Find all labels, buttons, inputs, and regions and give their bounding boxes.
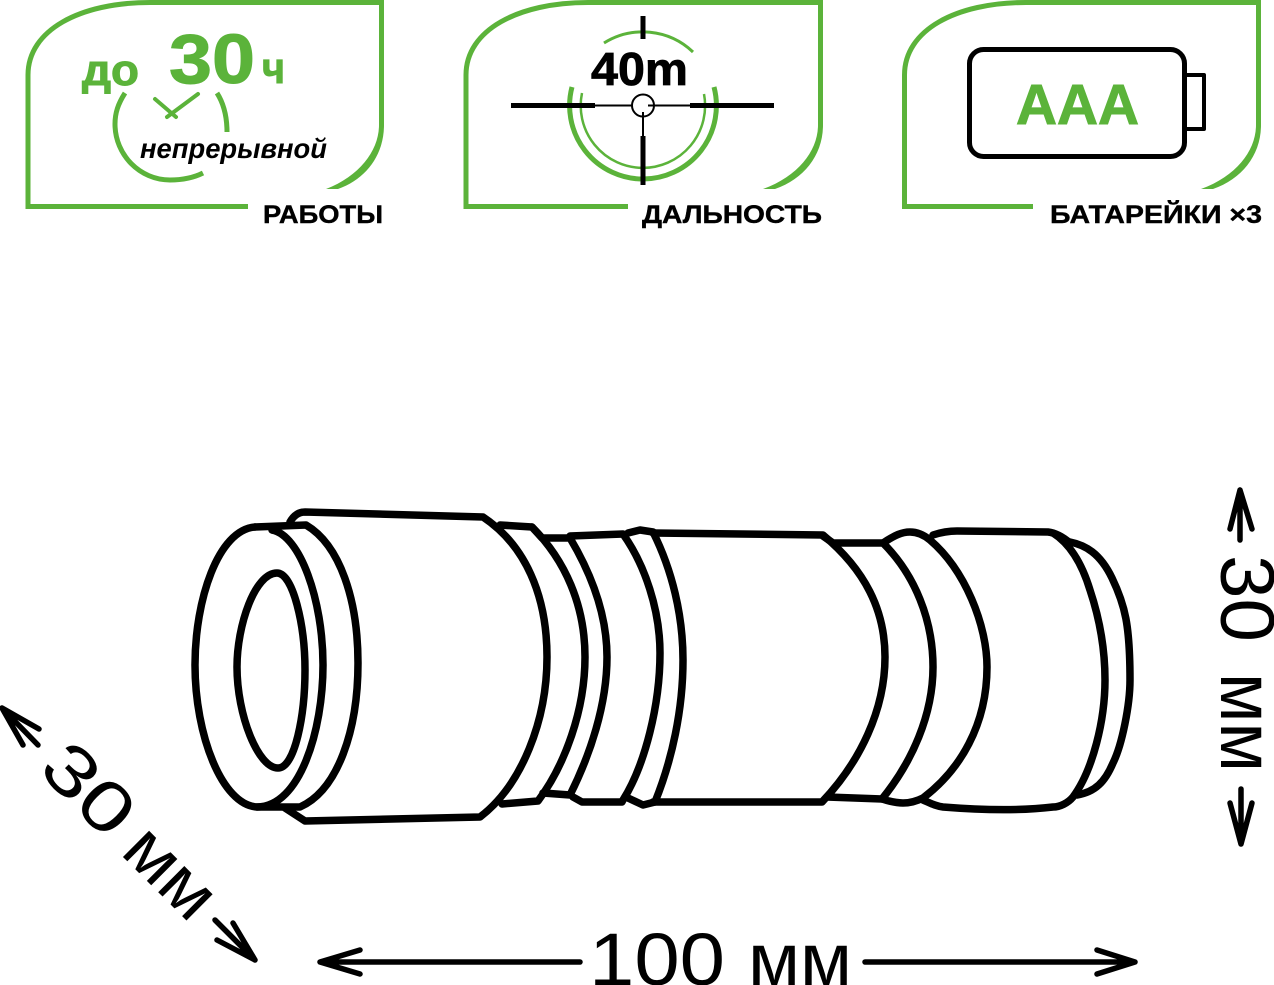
end cap rim — [1070, 542, 1130, 795]
dimension: length 100 mm — [320, 918, 1135, 985]
text: AAA: AAA — [1016, 73, 1139, 137]
arrow: up — [1230, 490, 1252, 540]
mid body — [570, 534, 660, 802]
neck band — [532, 527, 607, 795]
lens opening — [237, 573, 305, 768]
label: batteries x3: БАТАРЕЙКИ ×3 — [1050, 199, 1262, 229]
value: 40 m: 40m — [591, 43, 688, 95]
text: 30 mm — [1204, 555, 1274, 772]
end cap body — [923, 531, 1105, 810]
text: 30 mm: 30 — [26, 726, 152, 852]
big value: up to 30 hours: ч — [262, 44, 285, 93]
tail band — [823, 536, 933, 799]
dimension: height 30 mm — [1204, 490, 1274, 844]
big value: up to 30 hours: до — [82, 46, 139, 95]
panel frame — [904, 2, 1261, 206]
panel: working time — [28, 2, 384, 229]
icon: crosshair — [511, 16, 774, 185]
text: continuous: непрерывной — [140, 133, 327, 164]
big value: up to 30 hours — [82, 20, 285, 98]
dimension: depth 30 mm — [2, 708, 255, 960]
grip ring — [628, 530, 683, 805]
arrow: left — [320, 950, 580, 974]
bezel ring — [255, 525, 358, 807]
icon: battery — [970, 50, 1204, 156]
label: range: ДАЛЬНОСТЬ — [642, 201, 822, 229]
panel frame — [28, 2, 384, 206]
front lens ring — [195, 527, 323, 807]
head body — [285, 512, 547, 821]
panel: batteries — [904, 2, 1262, 229]
collar band — [500, 525, 585, 804]
icon: clock — [115, 93, 227, 180]
panel frame — [466, 2, 823, 206]
tail ring — [882, 532, 987, 803]
flashlight drawing — [195, 512, 1130, 821]
arrow: right — [865, 950, 1135, 974]
text: 30 mm: мм — [109, 809, 235, 935]
main tube — [653, 533, 885, 802]
text: 30 mm — [26, 726, 235, 935]
text: 100 mm — [589, 918, 852, 985]
arrow: down — [1230, 789, 1252, 844]
big value: up to 30 hours: 30 — [169, 20, 255, 98]
arrow: lower right — [215, 920, 255, 960]
panel: range — [466, 2, 823, 229]
arrow: upper left — [2, 708, 39, 745]
label: operation: РАБОТЫ — [263, 201, 383, 229]
